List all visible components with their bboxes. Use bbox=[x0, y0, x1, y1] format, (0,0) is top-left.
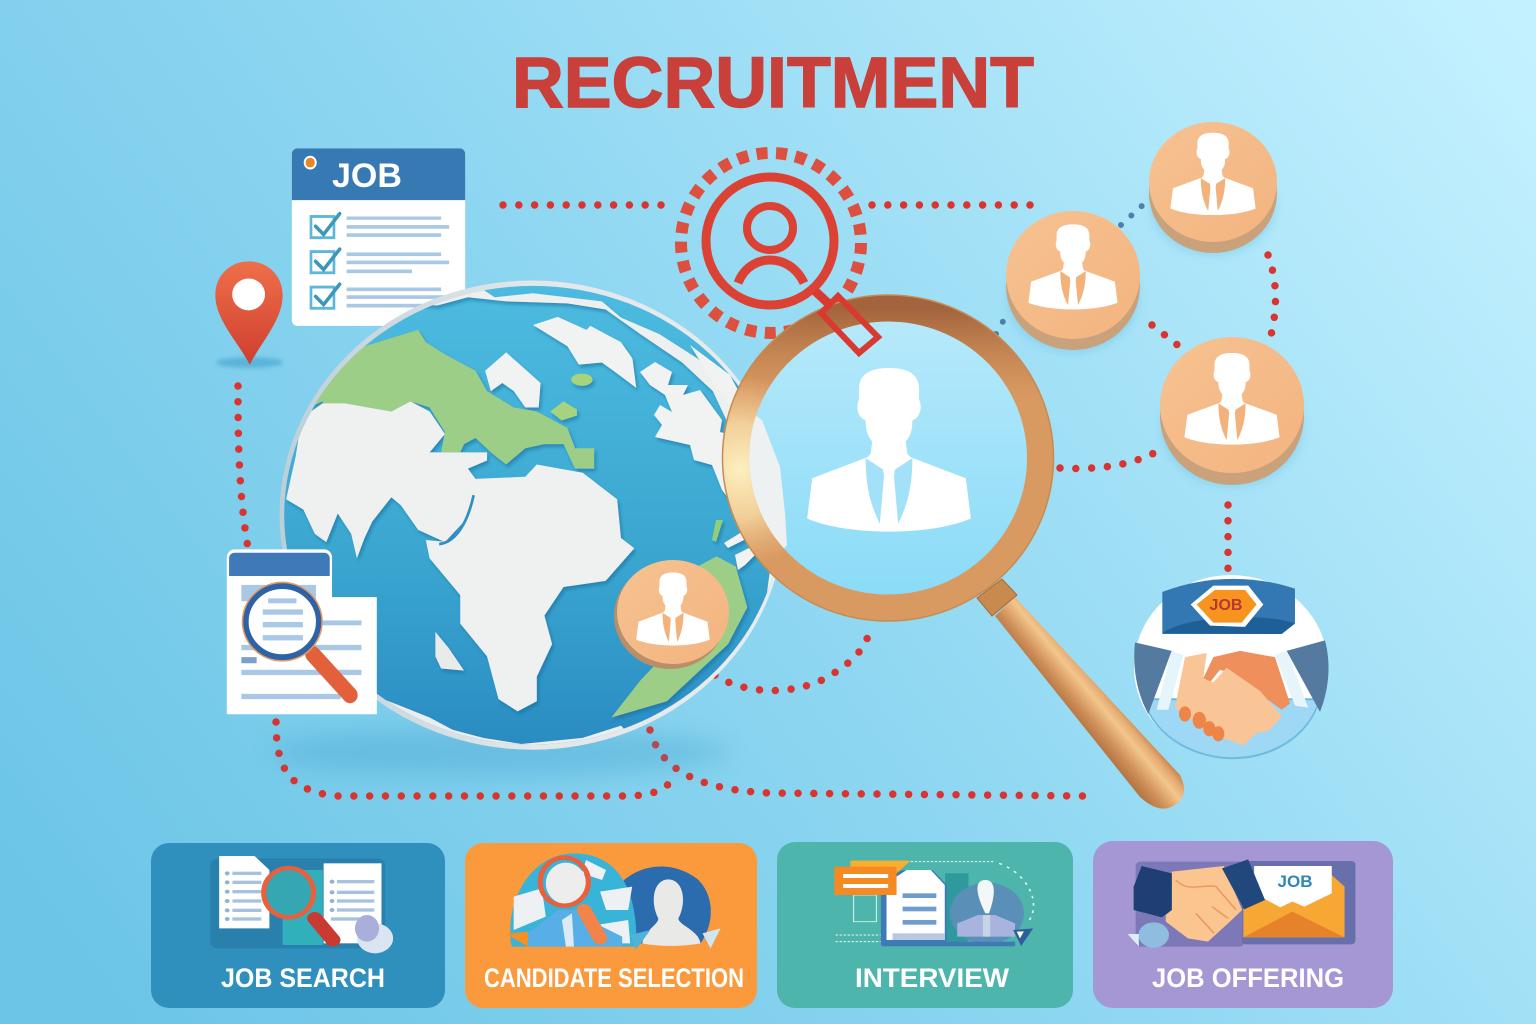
handshake job badge: JOB bbox=[1210, 597, 1242, 614]
landmass: Africa and Asia bbox=[286, 401, 634, 711]
globe edge seen through lens bbox=[748, 410, 787, 560]
candidate disc: middle left bbox=[1006, 211, 1140, 352]
globe bbox=[280, 281, 795, 754]
landmass: Scandinavia bbox=[485, 352, 541, 407]
handle collar bbox=[977, 579, 1017, 616]
job checklist card: JOB bbox=[332, 157, 402, 195]
dotted connector lines bbox=[238, 203, 1276, 796]
red candidate search icon bbox=[681, 153, 861, 333]
step card: interview bbox=[777, 842, 1073, 1008]
candidate silhouette bbox=[807, 368, 971, 532]
banner bbox=[1162, 579, 1295, 634]
candidate disc: lower right bbox=[1160, 337, 1304, 486]
job checklist card bbox=[292, 148, 465, 326]
rim: south bbox=[386, 700, 624, 744]
light hand bbox=[1175, 653, 1282, 746]
step card: job search bbox=[151, 843, 445, 1008]
handshake job badge bbox=[1134, 575, 1329, 759]
island: Madagascar bbox=[435, 632, 464, 671]
rim bbox=[722, 295, 1054, 621]
globe shadow bbox=[270, 728, 730, 776]
right sleeve bbox=[1287, 640, 1329, 712]
island: green bbox=[571, 374, 593, 386]
icon: candidate selection bbox=[506, 853, 721, 949]
orange hand bbox=[1203, 651, 1290, 710]
fingers bbox=[1179, 706, 1224, 741]
magnifying glass bbox=[722, 295, 1184, 809]
title: RECRUITMENT bbox=[512, 44, 1034, 123]
red magnifier clasp bbox=[815, 291, 878, 353]
island: green small bbox=[550, 401, 577, 420]
candidate disc: on globe bbox=[614, 560, 729, 669]
step card: interview: INTERVIEW bbox=[855, 963, 1010, 993]
landmass: Europe green bbox=[309, 330, 594, 469]
step card: candidate selection bbox=[465, 843, 757, 1008]
magnifier handle bbox=[313, 654, 350, 695]
lens bbox=[746, 318, 1030, 598]
step card: job search: JOB SEARCH bbox=[221, 963, 385, 993]
step card: candidate selection: CANDIDATE SELECTION bbox=[484, 963, 744, 993]
left sleeve bbox=[1134, 642, 1172, 714]
job hexagon bbox=[1191, 586, 1263, 627]
icon: location pin bbox=[215, 261, 283, 368]
landmass: Asia north bbox=[533, 317, 636, 388]
handle bbox=[995, 597, 1184, 809]
step card: job offering: JOB bbox=[1278, 872, 1312, 891]
icon: job search bbox=[210, 856, 393, 953]
icon: job offering bbox=[1128, 859, 1355, 948]
step card: job offering bbox=[1093, 841, 1393, 1008]
candidate disc: top bbox=[1149, 122, 1277, 255]
step card: job offering: JOB OFFERING bbox=[1152, 963, 1344, 993]
cuffs bbox=[1157, 651, 1183, 710]
landmass: south America green bbox=[611, 556, 747, 718]
lower basin bbox=[1143, 699, 1320, 758]
icon: interview bbox=[834, 861, 1034, 946]
landmass: northern rim bbox=[424, 290, 731, 420]
sea: red sea bbox=[439, 495, 474, 544]
landmass: east Asia and islands bbox=[640, 345, 773, 594]
document with magnifier bbox=[227, 549, 377, 714]
